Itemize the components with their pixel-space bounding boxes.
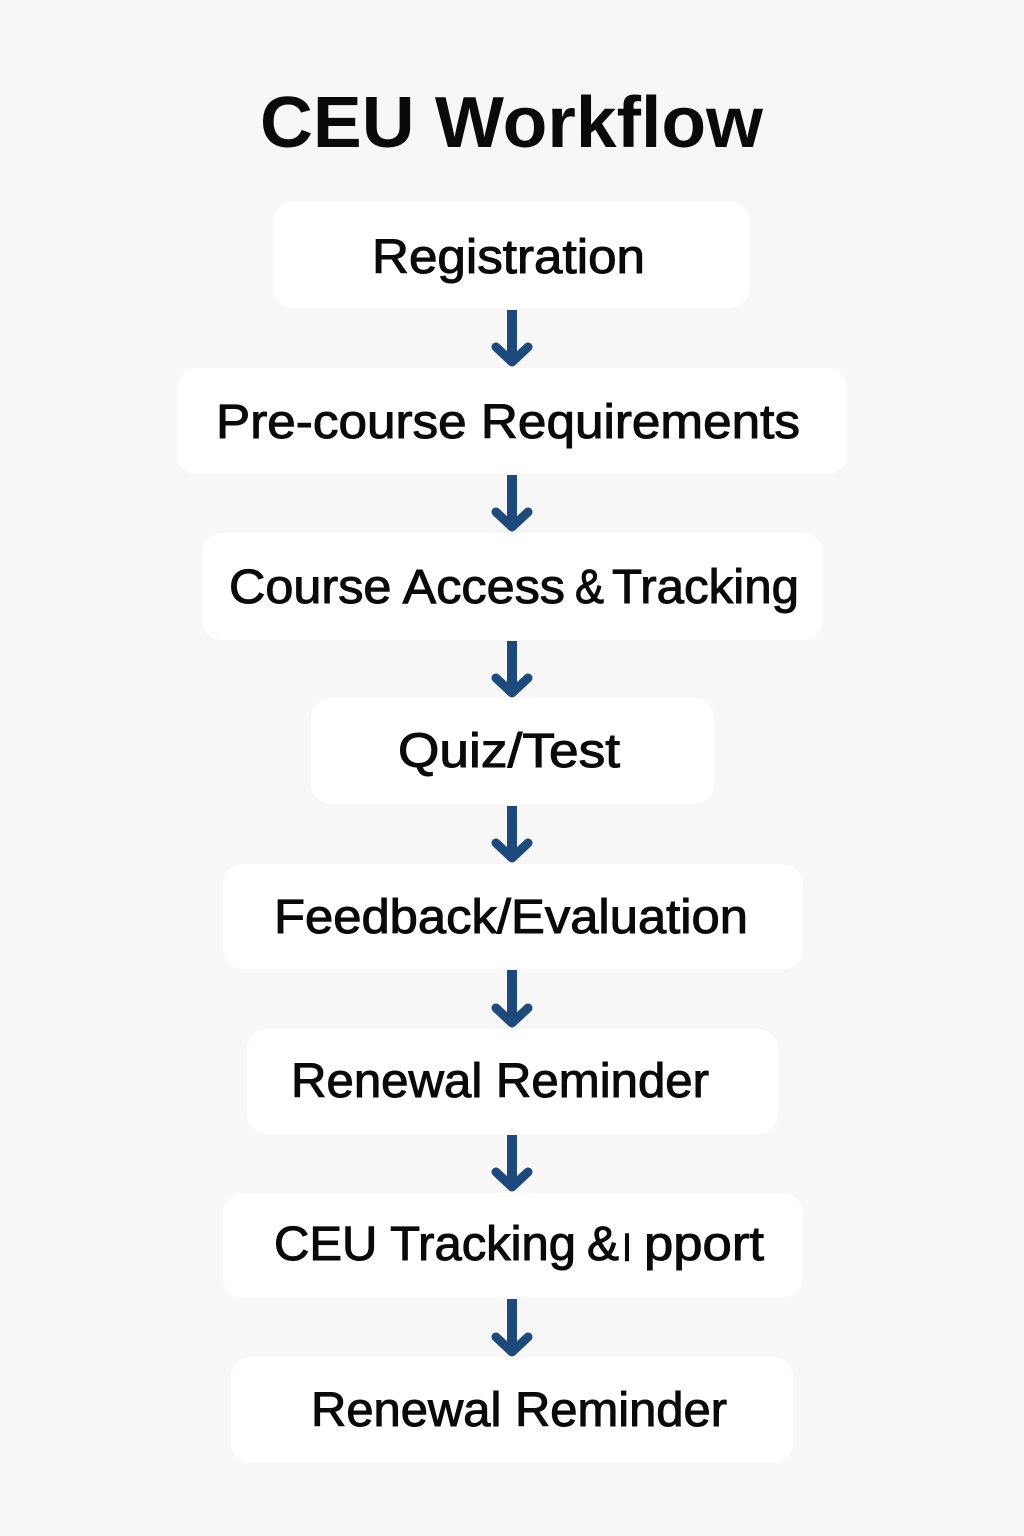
- step: Quiz/Test: Quiz/Test: [398, 725, 620, 778]
- step: Course Access & Tracking: Course Access: [229, 561, 565, 614]
- step: Feedback/Evaluation: Feedback/Evaluation: [274, 891, 748, 944]
- step: Course Access & Tracking: &: [575, 561, 604, 614]
- step: final Renewal Reminder: Renewal Reminder: [311, 1384, 727, 1437]
- step: Course Access & Tracking: [202, 533, 823, 640]
- step: Quiz/Test: [311, 698, 714, 804]
- step: Pre-course Requirements: Pre-course Requirements: [216, 396, 800, 449]
- title: CEU Workflow: [260, 83, 764, 163]
- arrow: Pre-course Requirements to Course Access: [496, 475, 528, 527]
- arrow: CEU Tracking to final Renewal Reminder: [496, 1299, 528, 1352]
- step: CEU Tracking & Report: pport: [644, 1218, 764, 1271]
- arrow: Quiz/Test to Feedback/Evaluation: [496, 806, 528, 858]
- arrow: Feedback/Evaluation to Renewal Reminder: [496, 970, 528, 1023]
- step: CEU Tracking & Report: ı: [623, 1218, 631, 1271]
- step: Pre-course Requirements: [177, 368, 847, 474]
- step: CEU Tracking & Report: CEU Tracking: [274, 1218, 576, 1271]
- step: Feedback/Evaluation: [223, 864, 803, 969]
- step: final Renewal Reminder: [231, 1357, 793, 1463]
- arrow: Course Access to Quiz/Test: [496, 641, 528, 693]
- step: Registration: Registration: [372, 231, 645, 284]
- step: Renewal Reminder: [247, 1029, 778, 1134]
- arrow: Renewal Reminder to CEU Tracking: [496, 1135, 528, 1187]
- step: Registration: [273, 202, 750, 308]
- step: CEU Tracking & Report: [223, 1193, 803, 1298]
- step: CEU Tracking & Report: &: [587, 1218, 619, 1271]
- step: Renewal Reminder: Renewal Reminder: [291, 1055, 709, 1108]
- arrow: Registration to Pre-course Requirements: [496, 310, 528, 362]
- step: Course Access & Tracking: Tracking: [612, 561, 799, 614]
